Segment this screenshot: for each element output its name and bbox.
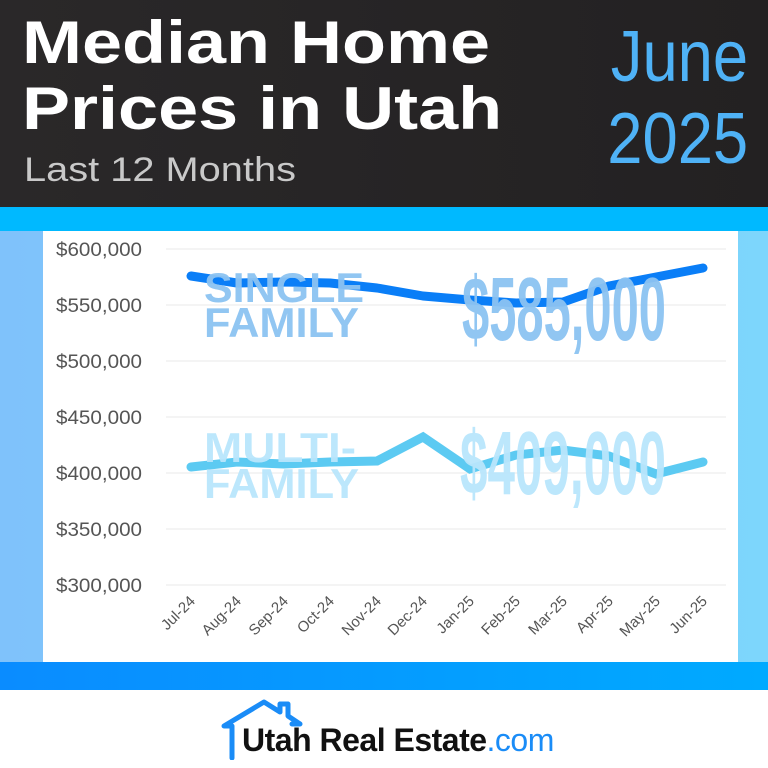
title xyxy=(22,9,502,142)
y axis labels: $450,000 xyxy=(56,408,142,429)
label single family: FAMILY xyxy=(204,299,359,346)
y axis labels: $550,000 xyxy=(56,296,142,317)
blue band bottom xyxy=(0,662,768,690)
header xyxy=(0,0,768,207)
x axis labels: Jul-24 xyxy=(158,593,199,634)
label multi family: FAMILY xyxy=(204,460,359,507)
date: June xyxy=(611,17,748,97)
blue band top xyxy=(0,207,768,231)
chart panel xyxy=(43,231,738,662)
subtitle: Last 12 Months xyxy=(24,151,296,189)
logo xyxy=(222,700,554,760)
label single family xyxy=(204,264,364,346)
x axis labels: Feb-25 xyxy=(478,593,524,638)
title: Prices in Utah xyxy=(22,75,502,142)
y axis labels xyxy=(56,240,142,597)
x axis labels: Apr-25 xyxy=(573,593,617,637)
single family line xyxy=(191,268,703,303)
x axis labels: Dec-24 xyxy=(385,593,431,639)
label multi family: MULTI- xyxy=(204,424,356,471)
label multi family xyxy=(204,424,359,507)
logo text: Utah Real Estate.com xyxy=(242,722,554,758)
title: Median Home xyxy=(22,9,490,76)
x axis labels: May-25 xyxy=(616,593,664,640)
y axis labels: $300,000 xyxy=(56,576,142,597)
date xyxy=(607,17,748,179)
x axis labels: Oct-24 xyxy=(294,593,338,637)
icon: house xyxy=(222,700,302,760)
x axis labels: Jan-25 xyxy=(433,593,478,637)
side background xyxy=(0,231,768,662)
y axis labels: $500,000 xyxy=(56,352,142,373)
y axis labels: $600,000 xyxy=(56,240,142,261)
x axis labels: Sep-24 xyxy=(246,593,292,639)
multi family line xyxy=(191,437,703,474)
y axis labels: $400,000 xyxy=(56,464,142,485)
x axis labels: Mar-25 xyxy=(525,593,571,638)
date: 2025 xyxy=(607,99,748,179)
x axis labels xyxy=(158,593,711,640)
x axis labels: Aug-24 xyxy=(199,593,245,639)
x axis labels: Nov-24 xyxy=(339,593,385,639)
label single family: SINGLE xyxy=(204,264,364,311)
x axis labels: Jun-25 xyxy=(666,593,711,637)
y axis labels: $350,000 xyxy=(56,520,142,541)
